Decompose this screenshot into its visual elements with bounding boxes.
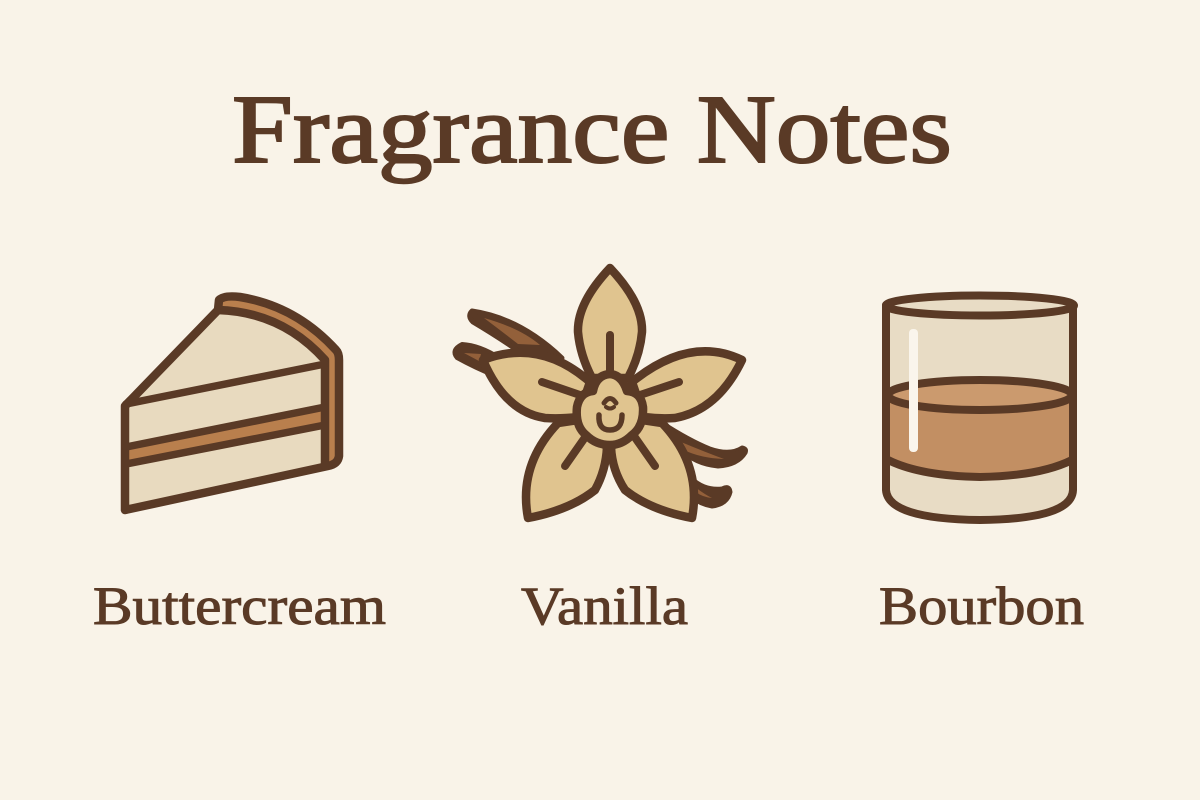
lower right petal — [611, 420, 694, 518]
glass outline — [886, 305, 1073, 520]
icon: buttercream cake slice — [125, 296, 339, 510]
vanilla bean pods upper left — [454, 311, 562, 376]
cake top surface — [126, 310, 324, 405]
title: Fragrance Notes — [232, 76, 952, 183]
glass rim — [886, 296, 1074, 316]
label: Vanilla: Vanilla — [521, 576, 688, 636]
label: Bourbon: Bourbon — [879, 576, 1084, 636]
left petal — [483, 353, 590, 418]
flower centre — [577, 374, 643, 445]
cake crust — [218, 296, 338, 466]
right petal — [632, 351, 742, 418]
label: Buttercream: Buttercream — [93, 576, 386, 636]
icon: bourbon glass — [886, 296, 1074, 520]
top petal — [578, 268, 642, 378]
glass highlight — [909, 329, 918, 452]
bourbon liquid — [888, 395, 1072, 477]
lower left petal — [526, 420, 607, 518]
vanilla bean pods lower right — [662, 422, 746, 507]
icon: vanilla flower — [454, 268, 746, 518]
cake outline — [125, 296, 339, 510]
liquid base edge — [888, 460, 1072, 477]
cake lower layers — [126, 363, 325, 510]
cake filling — [126, 407, 325, 464]
liquid surface — [888, 380, 1072, 410]
glass body — [886, 305, 1073, 520]
